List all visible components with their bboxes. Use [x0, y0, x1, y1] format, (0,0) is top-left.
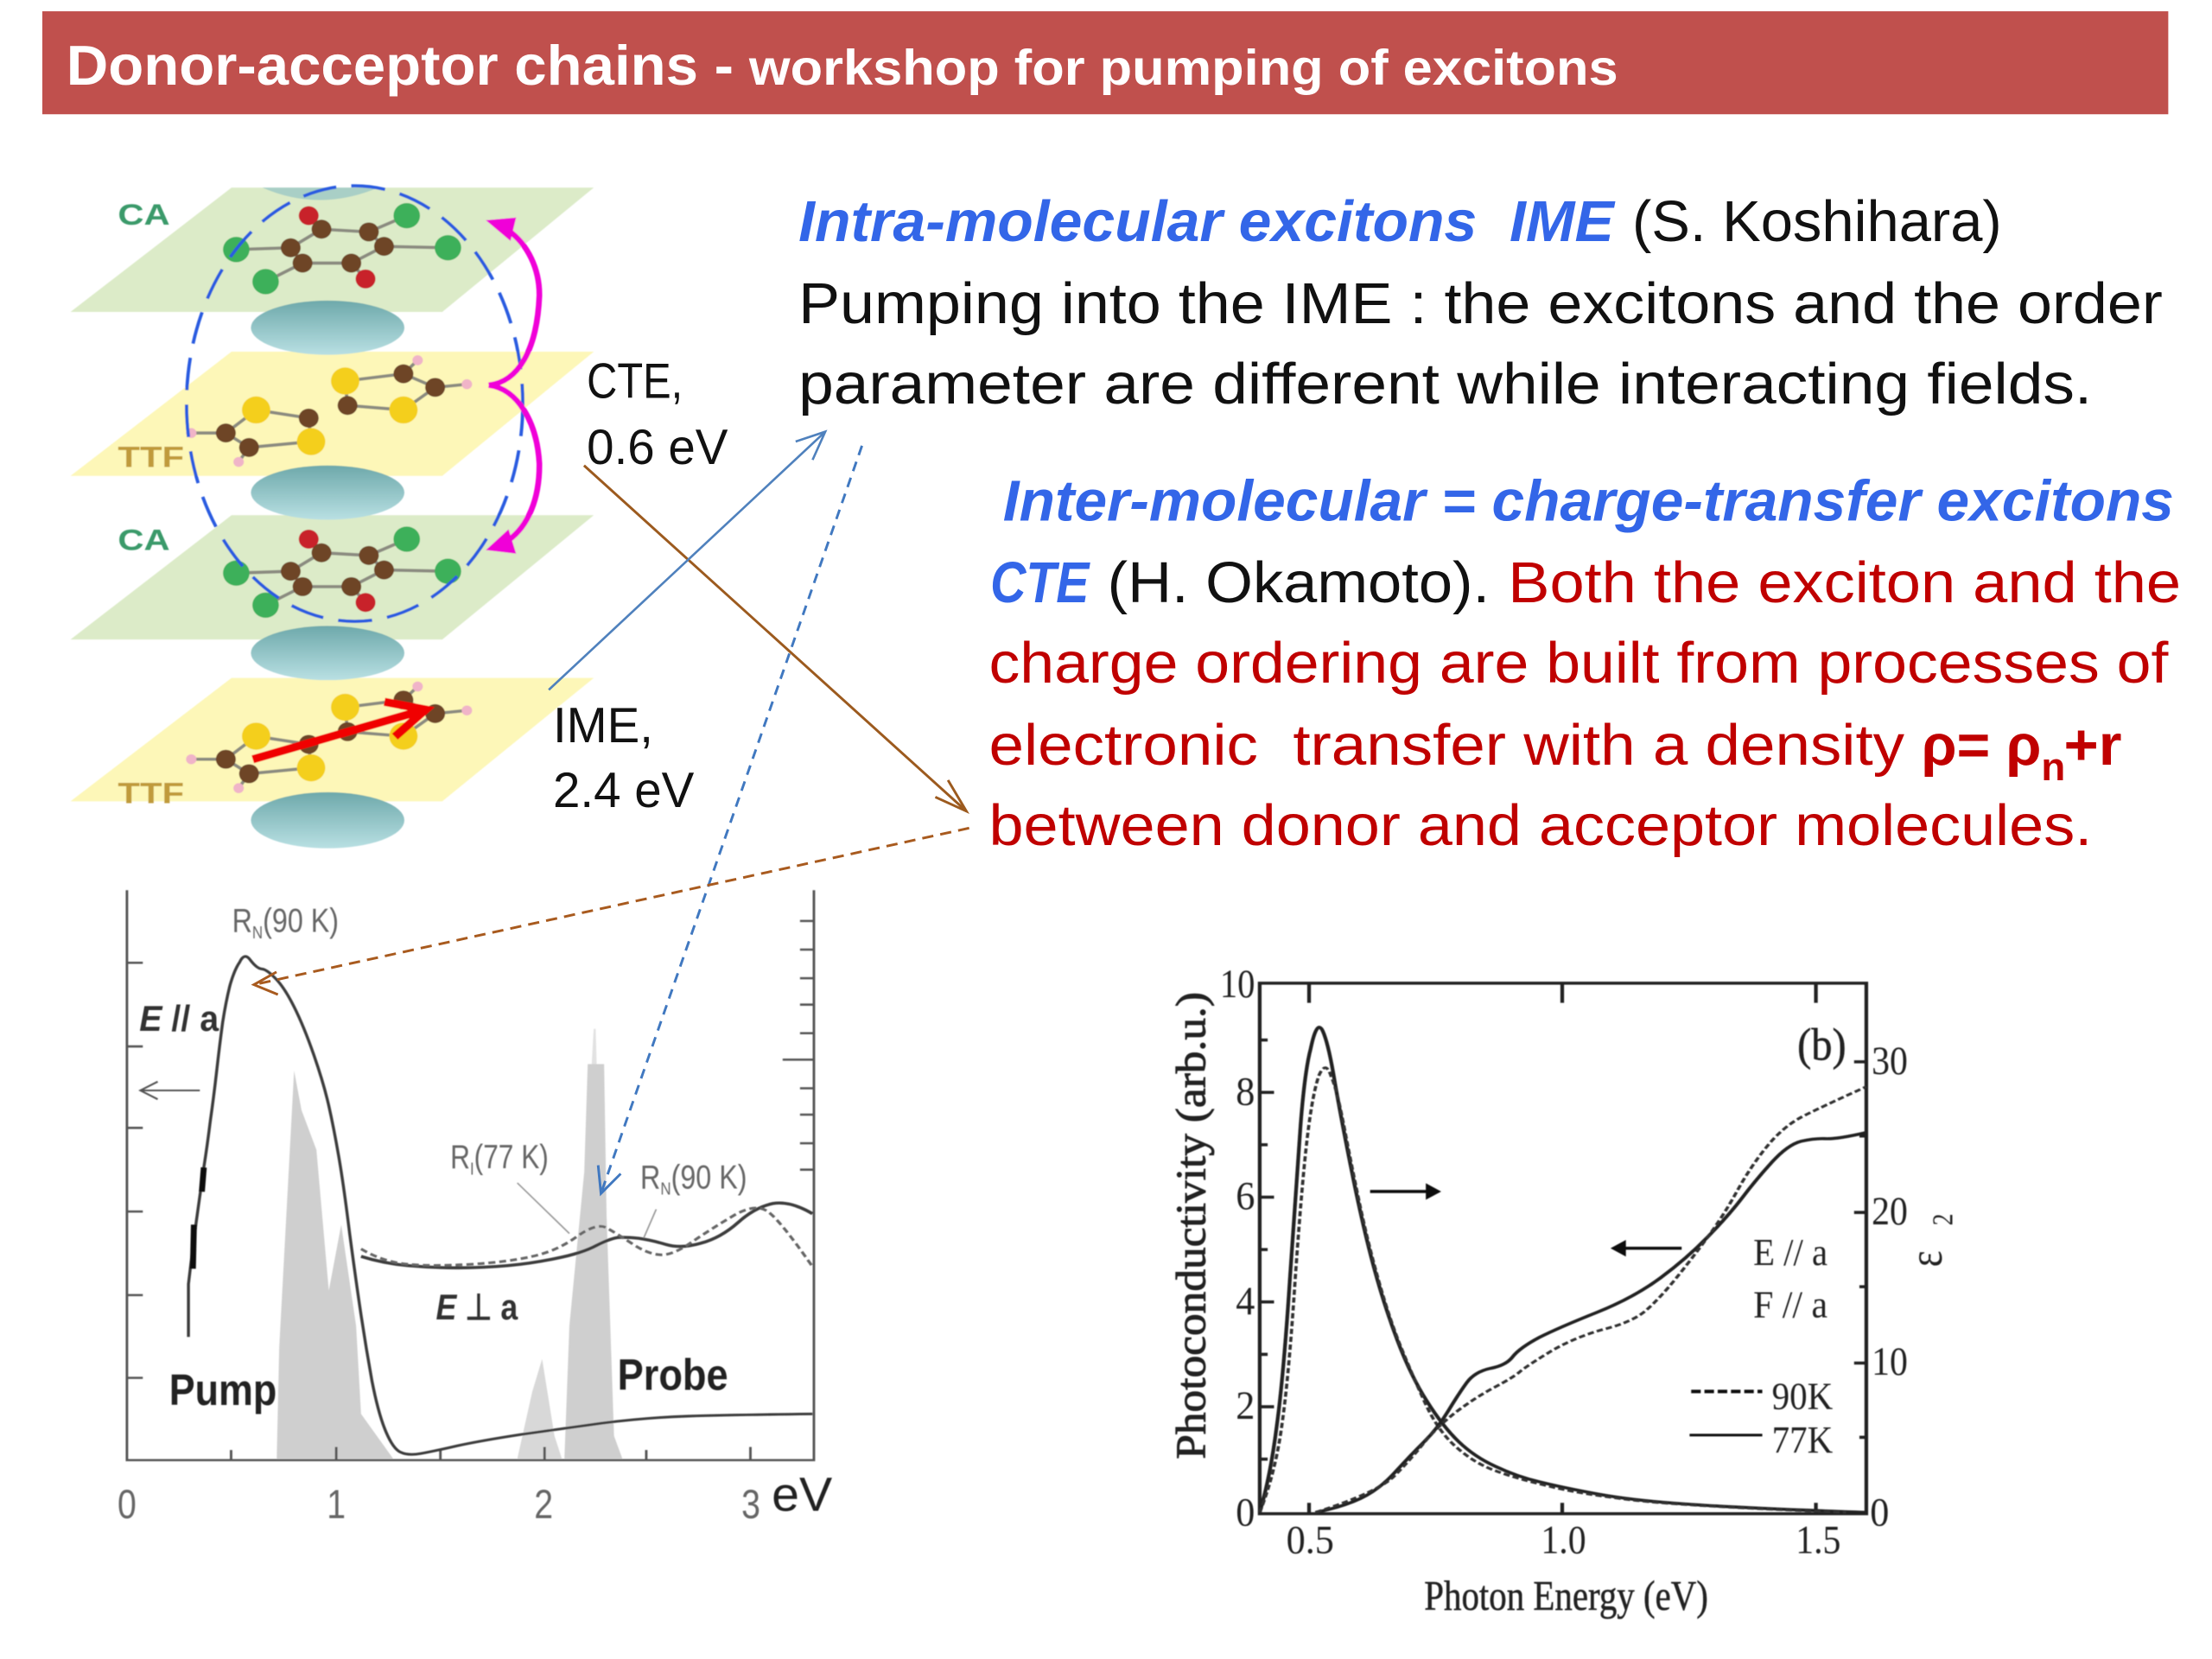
text block: intra-molecular excitons [798, 189, 2163, 416]
arrow: inter-molecular text to pump peak [254, 828, 969, 995]
chart: photoconductivity spectrum: 0 [1870, 1491, 1889, 1535]
chart: reflectivity spectrum: R [640, 1159, 668, 1196]
chart: photoconductivity spectrum: Photoconductivity (arb.u.) [1167, 992, 1215, 1459]
text block: inter-molecular excitons: CTE [990, 550, 1090, 615]
text block: inter-molecular excitons: +r [2064, 713, 2122, 778]
chart: reflectivity spectrum: 2 [534, 1482, 553, 1527]
chart: reflectivity spectrum: (77 K) [474, 1138, 549, 1176]
text block: inter-molecular excitons: ρ= ρ [1922, 713, 2041, 778]
molecular stack diagram [71, 186, 594, 849]
chart: reflectivity spectrum: E // a [139, 1000, 219, 1039]
text block: inter-molecular excitons: charge ordering are built from processes of [988, 631, 2169, 696]
text block: intra-molecular excitons: Intra-molecular excitons IME [798, 189, 1616, 254]
chart: photoconductivity spectrum: 6 [1236, 1174, 1255, 1218]
text block: inter-molecular excitons: Both the exciton and the [1508, 550, 2181, 615]
label: CTE energy: CTE, [587, 353, 683, 409]
text block: intra-molecular excitons: parameter are different while interacting fields. [798, 352, 2092, 416]
chart: reflectivity spectrum: N [252, 922, 263, 942]
chart: reflectivity spectrum: Pump [169, 1366, 276, 1414]
title banner [42, 11, 2168, 114]
label: CTE energy: 0.6 eV [587, 420, 728, 475]
text block: intra-molecular excitons: Pumping into the IME : the excitons and the order [798, 271, 2163, 336]
text block: inter-molecular excitons: (H. Okamoto). [1108, 550, 1490, 615]
chart: photoconductivity spectrum: 4 [1236, 1280, 1255, 1324]
chart: photoconductivity spectrum [1167, 963, 1959, 1619]
molecular stack diagram: CA [118, 199, 170, 232]
chart: reflectivity spectrum: N [660, 1179, 671, 1198]
chart: photoconductivity spectrum: 1.5 [1796, 1518, 1840, 1562]
chart: reflectivity spectrum [118, 890, 832, 1527]
label: IME energy: 2.4 eV [553, 763, 694, 818]
chart: reflectivity spectrum: 0 [118, 1482, 137, 1527]
text block: inter-molecular excitons [988, 468, 2181, 858]
chart: photoconductivity spectrum: ε [1899, 1250, 1952, 1267]
chart: photoconductivity spectrum: 0.5 [1287, 1518, 1334, 1562]
label: IME energy: IME, [553, 698, 653, 753]
chart: reflectivity spectrum: (90 K) [671, 1159, 747, 1196]
chart: reflectivity spectrum: I [470, 1159, 474, 1179]
text block: inter-molecular excitons: between donor and acceptor molecules. [988, 793, 2092, 858]
chart: reflectivity spectrum: R [450, 1138, 478, 1176]
chart: photoconductivity spectrum: F // a [1753, 1283, 1827, 1325]
chart: photoconductivity spectrum: 10 [1220, 963, 1255, 1007]
chart: photoconductivity spectrum: 77K [1772, 1419, 1833, 1461]
molecular stack diagram: TTF [118, 441, 184, 474]
text block: intra-molecular excitons: (S. Koshihara) [1632, 189, 2002, 254]
chart: photoconductivity spectrum: 8 [1236, 1070, 1255, 1114]
molecular stack diagram: TTF [118, 777, 184, 810]
chart: photoconductivity spectrum: (b) [1797, 1019, 1847, 1070]
chart: reflectivity spectrum: R [232, 902, 259, 939]
chart: photoconductivity spectrum: 90K [1772, 1375, 1833, 1417]
label: IME energy [553, 698, 694, 818]
chart: photoconductivity spectrum: 10 [1872, 1340, 1908, 1384]
text block: inter-molecular excitons: electronic transfer with a density [988, 713, 1905, 778]
chart: reflectivity spectrum: (90 K) [263, 902, 339, 939]
text block: inter-molecular excitons: n [2041, 745, 2065, 789]
label: CTE energy [587, 353, 728, 475]
title banner: Donor-acceptor chains - [67, 34, 734, 97]
chart: photoconductivity spectrum: 2 [1236, 1384, 1255, 1428]
molecular stack diagram: CA [118, 524, 170, 556]
chart: photoconductivity spectrum: 1.0 [1541, 1518, 1586, 1562]
chart: photoconductivity spectrum: 30 [1872, 1039, 1908, 1084]
chart: reflectivity spectrum: Probe [618, 1351, 728, 1400]
chart: reflectivity spectrum: 1 [327, 1482, 346, 1527]
chart: photoconductivity spectrum: E // a [1753, 1230, 1827, 1274]
chart: photoconductivity spectrum: 2 [1926, 1213, 1959, 1225]
title banner: workshop for pumping of excitons [748, 41, 1618, 96]
chart: photoconductivity spectrum: 20 [1872, 1189, 1908, 1234]
chart: reflectivity spectrum: eV [772, 1467, 832, 1522]
arrow: IME to intra-molecular text [549, 432, 825, 690]
arrow: CTE to inter-molecular text [584, 466, 966, 811]
chart: reflectivity spectrum: 3 [741, 1482, 760, 1527]
chart: reflectivity spectrum: E ⊥ a [436, 1287, 518, 1327]
chart: photoconductivity spectrum: Photon Energy (eV) [1424, 1573, 1708, 1619]
chart: photoconductivity spectrum: 0 [1236, 1491, 1255, 1535]
text block: inter-molecular excitons: Inter-molecular = charge-transfer excitons [1003, 468, 2174, 533]
arrow: intra-molecular text to probe peak [598, 446, 862, 1193]
